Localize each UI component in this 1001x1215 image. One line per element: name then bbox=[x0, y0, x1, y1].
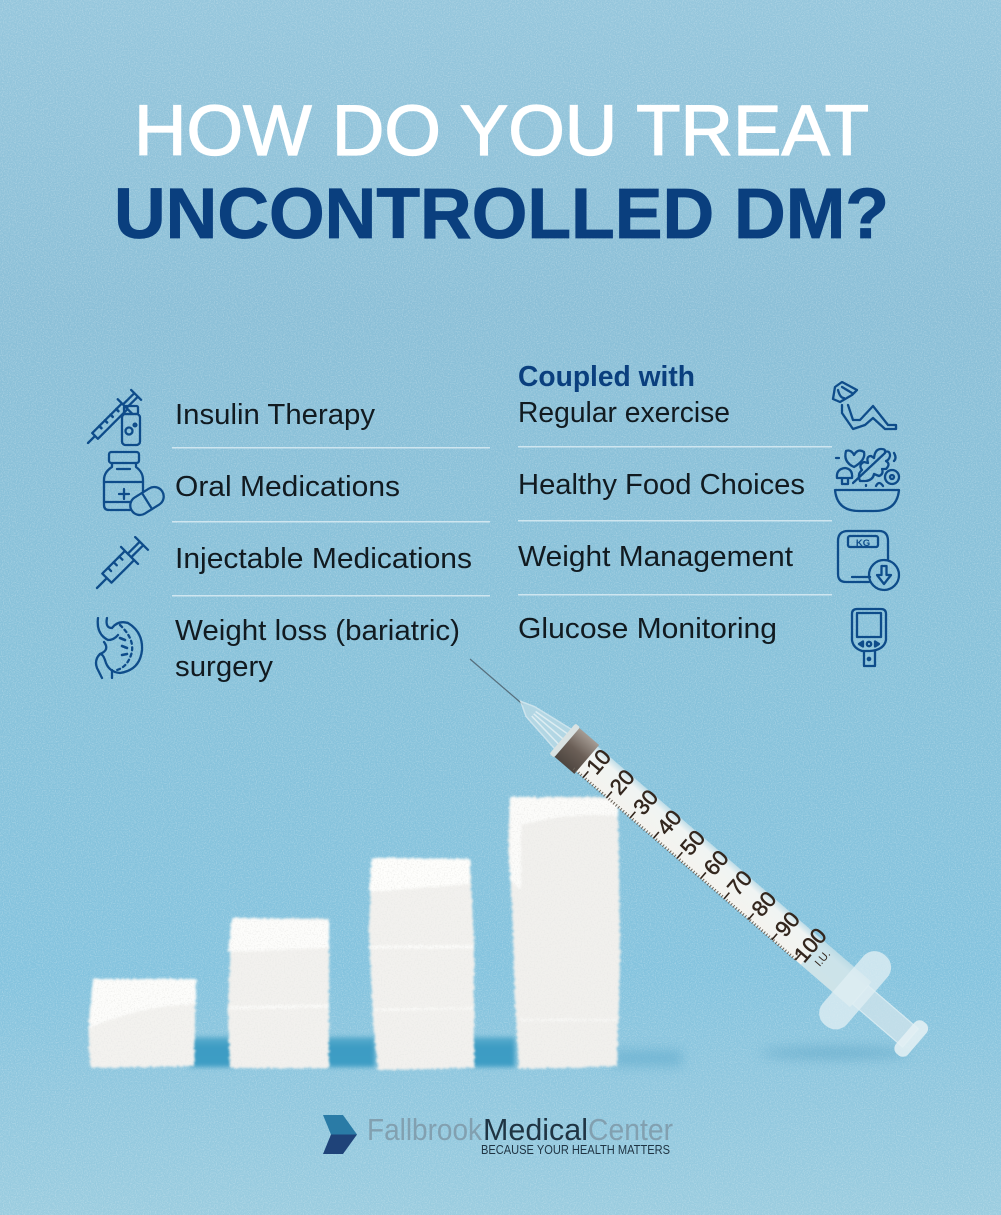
icon: glucose meter bbox=[852, 609, 886, 666]
dose numbers: 50 bbox=[675, 825, 710, 860]
title bbox=[114, 92, 889, 254]
sugar stack 3 bbox=[369, 858, 474, 1070]
collar bbox=[549, 723, 580, 758]
logo bbox=[323, 1112, 673, 1157]
dose numbers: 90 bbox=[770, 907, 805, 942]
title: HOW DO YOU TREAT bbox=[134, 92, 869, 171]
logo chevron bbox=[323, 1115, 357, 1154]
icon: healthy food bowl bbox=[835, 449, 899, 511]
text: Regular exercise: Regular exercise bbox=[518, 397, 730, 429]
dose numbers: 70 bbox=[722, 866, 757, 900]
logo wordmark bbox=[367, 1112, 673, 1147]
needle hub bbox=[512, 692, 572, 750]
panel: treatments list bbox=[172, 399, 490, 683]
plunger rod bbox=[853, 986, 918, 1047]
icon: syringe bbox=[89, 535, 150, 596]
icon: weighing scale: KG bbox=[856, 538, 870, 549]
icon: stomach bbox=[96, 618, 142, 678]
icon: exercise bbox=[833, 382, 896, 429]
sugar stack 4 bbox=[508, 797, 620, 1069]
dose numbers: 100 bbox=[789, 923, 832, 967]
logo wordmark: Center bbox=[588, 1112, 673, 1147]
finger flange bbox=[813, 945, 897, 1036]
panel: lifestyle list bbox=[518, 361, 832, 645]
dose numbers: 40 bbox=[652, 805, 687, 840]
text: Healthy Food Choices: Healthy Food Choices bbox=[518, 469, 805, 501]
text: Weight loss surgery: Weight loss (bariatric) bbox=[175, 615, 460, 647]
icon: weighing scale bbox=[838, 531, 899, 590]
text: Oral Medications: Oral Medications bbox=[175, 471, 400, 503]
hub ridges bbox=[529, 708, 569, 745]
text: Weight loss surgery bbox=[175, 615, 460, 683]
logo wordmark: Fallbrook bbox=[367, 1112, 482, 1147]
dose numbers: I.U. bbox=[813, 948, 833, 969]
dose numbers: 80 bbox=[746, 886, 781, 921]
needle bbox=[470, 659, 523, 705]
text: Insulin Therapy: Insulin Therapy bbox=[175, 399, 376, 431]
shadows under sugar stacks bbox=[190, 1037, 910, 1067]
translucent barrel end bbox=[801, 940, 872, 1007]
logo tagline: BECAUSE YOUR HEALTH MATTERS bbox=[481, 1143, 670, 1157]
title: UNCONTROLLED DM? bbox=[114, 175, 889, 254]
metal band bbox=[553, 727, 599, 774]
dose numbers: 20 bbox=[605, 765, 640, 799]
text: Glucose Monitoring: Glucose Monitoring bbox=[518, 613, 777, 645]
insulin syringe bbox=[440, 624, 947, 1079]
text: Injectable Medications: Injectable Medications bbox=[175, 543, 472, 575]
logo wordmark: Medical bbox=[483, 1112, 588, 1147]
icon: pill bottle and capsule bbox=[104, 452, 167, 519]
fine graduations bbox=[574, 769, 796, 960]
dose numbers: 30 bbox=[628, 785, 663, 820]
dose numbers: 60 bbox=[699, 845, 734, 880]
dose numbers bbox=[577, 740, 841, 975]
icon: insulin syringe and vial bbox=[81, 388, 143, 450]
text: Weight Management: Weight Management bbox=[518, 541, 793, 573]
dose numbers: 10 bbox=[581, 744, 616, 779]
barrel bbox=[572, 743, 872, 1007]
sugar cube 1 bbox=[89, 979, 196, 1068]
text: Coupled with: Coupled with bbox=[518, 361, 695, 393]
sugar stack 2 bbox=[228, 918, 329, 1068]
scale ticks bbox=[583, 771, 801, 960]
plunger end bbox=[891, 1017, 931, 1060]
text: Weight loss surgery: surgery bbox=[175, 651, 274, 683]
